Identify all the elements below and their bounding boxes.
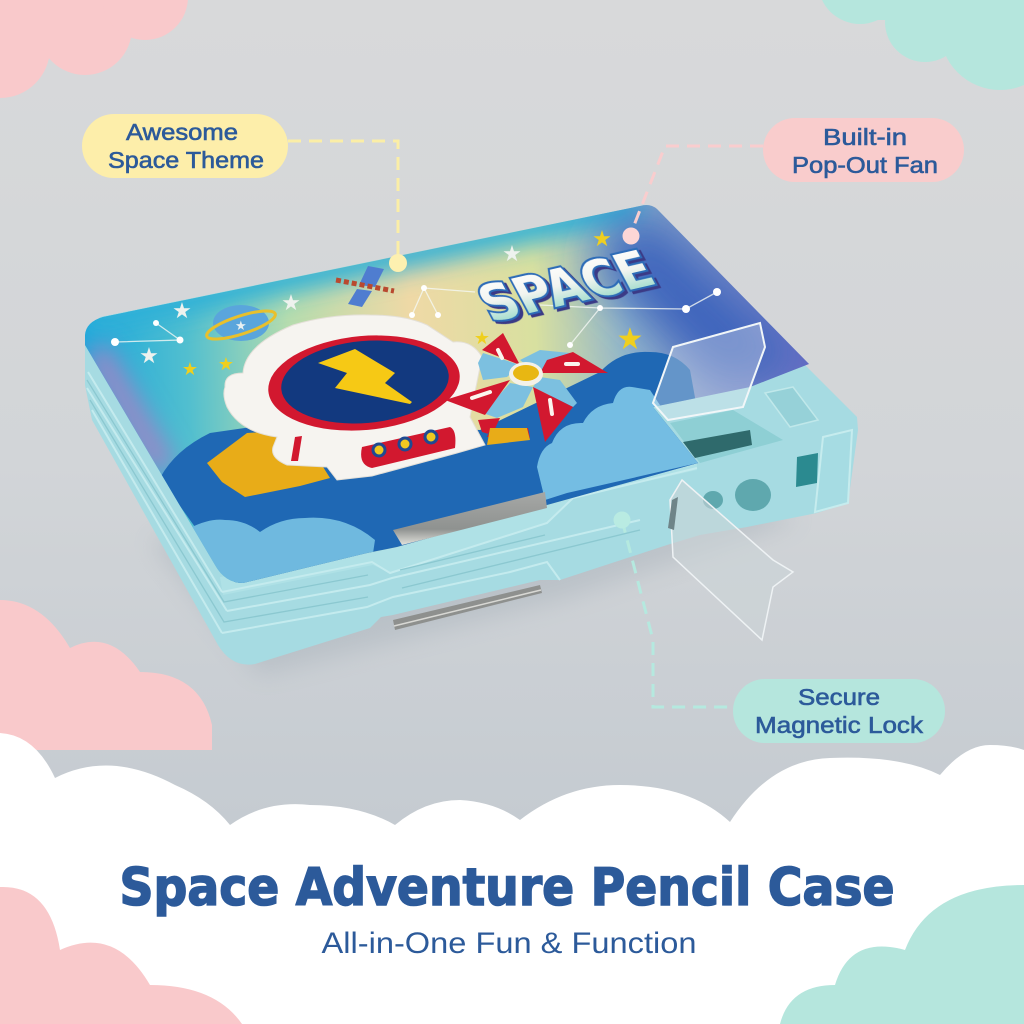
red visor ring [264,328,464,438]
side holes [703,479,771,511]
gold cloud [207,430,330,497]
gold patch under fan [487,428,530,445]
strap and gold behind fan [478,418,530,438]
pencil case [80,200,858,665]
cloud: left middle pink [0,600,212,750]
leader: built-in pop-out fan [622,146,763,244]
pinwheel fan [445,333,608,442]
satellite sticker [336,266,394,307]
leader: secure magnetic lock [614,512,733,707]
constellation lines and stars: ★ [474,328,490,348]
cloud: top right mint [818,0,1024,90]
callout: secure magnetic lock: Secure [798,684,880,710]
constellation lines and stars: ★ [617,323,643,356]
case body [85,206,858,665]
SPACE title on lid: SPACE [468,240,665,334]
front ribs [87,372,697,633]
constellation lines and stars: ★ [592,226,612,251]
planet sticker [204,305,278,345]
circuit contacts [683,430,752,458]
lightning bolt [318,349,412,404]
lid with printed art [80,200,820,590]
lower bar highlight [394,590,541,626]
metal latch [393,492,547,545]
transparent upper flap [653,323,765,420]
callout: secure magnetic lock: Magnetic Lock [755,712,924,738]
leader: awesome space theme [288,141,407,272]
astronaut helmet and body [224,315,485,480]
panel buttons [373,431,437,456]
side column [815,430,852,512]
front shelf [220,463,697,595]
side button [765,387,818,427]
dark blue cloud [160,352,710,590]
lower metal bar [393,585,542,630]
navy visor [278,334,452,430]
red control panel [361,427,455,468]
callout: built-in pop-out fan [763,118,964,182]
constellation lines and stars: ★ [139,343,159,368]
constellation lines and stars: ★ [218,354,234,374]
bottom white cloud [0,733,1024,1024]
planet sticker: ★ [235,318,247,333]
constellation lines and stars: ★ [182,359,198,379]
callout: awesome space theme: Space Theme [108,147,264,173]
cloud: top left pink [0,0,188,98]
light cloud right [537,387,698,500]
constellation lines and stars: ★ [172,298,192,323]
callout: built-in pop-out fan: Pop-Out Fan [792,152,938,178]
square port [796,453,818,487]
subtitle: All-in-One Fun & Function [322,927,696,960]
shadow under case [150,490,800,675]
callout: awesome space theme [82,114,288,178]
battery compartment [670,410,783,463]
callout: awesome space theme: Awesome [126,119,238,145]
astronaut [224,315,530,480]
constellation lines and stars: ★ [502,241,522,266]
flap hinge [668,497,678,530]
constellation lines and stars: ★ [281,290,301,315]
callout: built-in pop-out fan: Built-in [823,124,907,150]
transparent lower flap [670,480,793,640]
light cloud left [192,518,375,583]
cloud: bottom right mint [780,885,1024,1024]
constellation lines and stars [111,226,721,379]
title: Space Adventure Pencil Case [120,858,894,918]
cloud: bottom left pink [0,887,242,1024]
callout: secure magnetic lock [733,679,945,743]
arm stripe [291,436,302,461]
